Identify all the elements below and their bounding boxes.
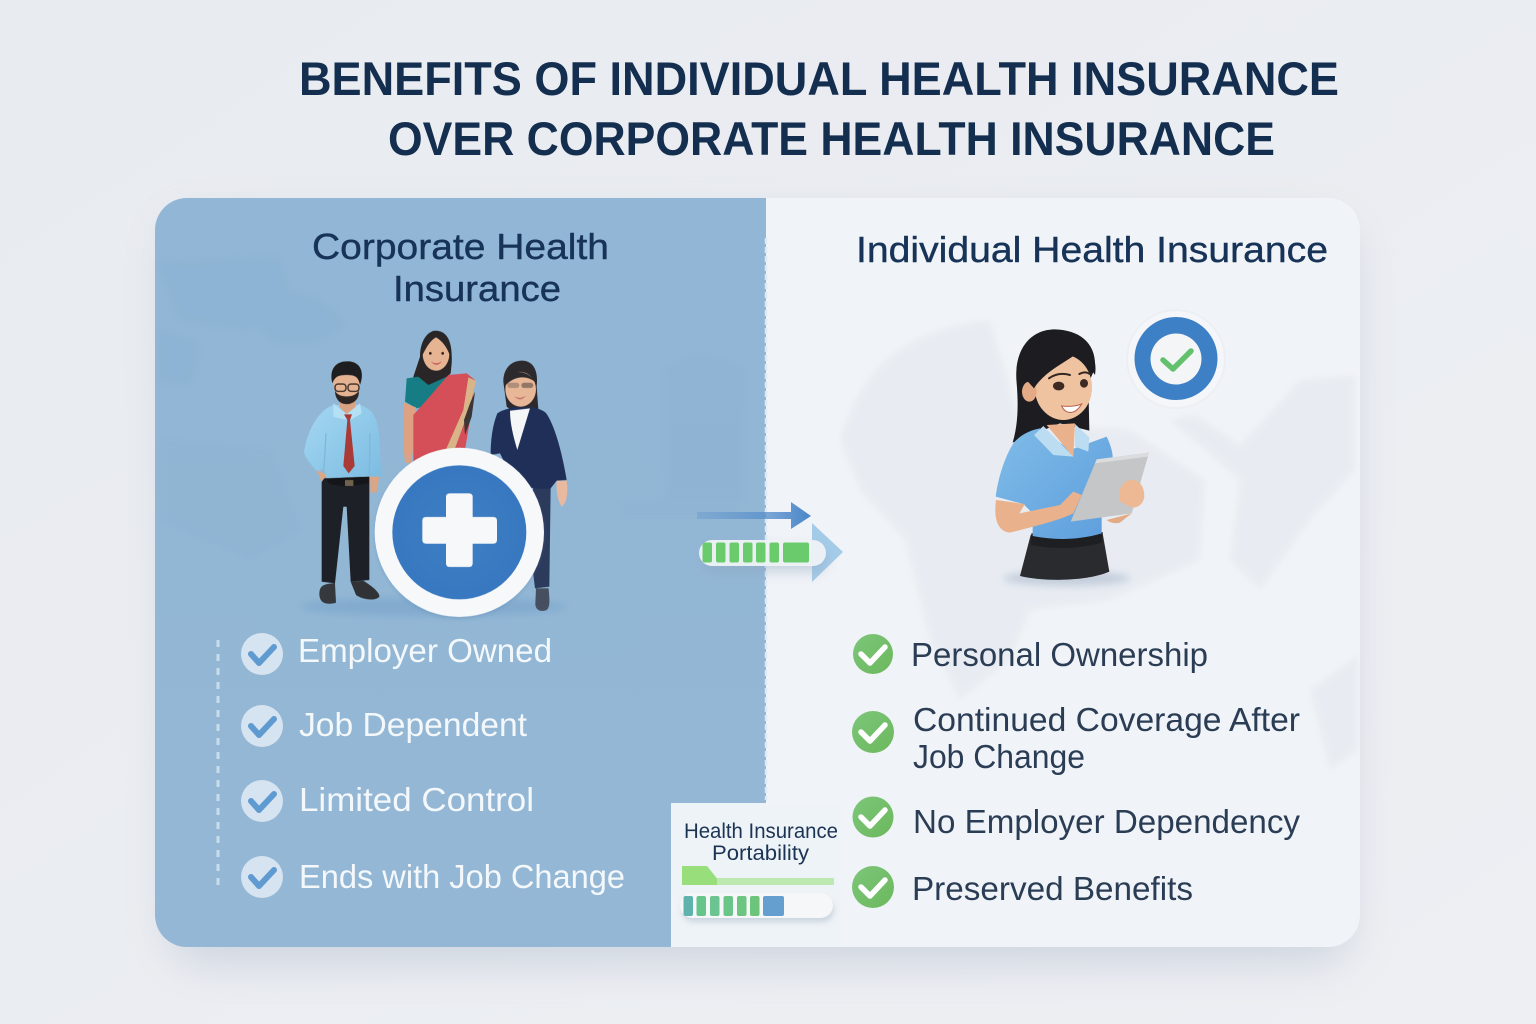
title: OVER CORPORATE HEALTH INSURANCE — [388, 112, 1275, 165]
item: job dependent: Job Dependent — [299, 706, 527, 743]
portability transfer arrows and bar — [697, 502, 843, 582]
arrow: top blue — [697, 502, 811, 529]
callout heading: Portability — [712, 842, 810, 865]
item: employer owned: Employer Owned — [298, 632, 552, 669]
item: limited control: Limited Control — [299, 781, 534, 818]
faint world map right — [840, 320, 1358, 770]
item: no employer dependency: No Employer Dependency — [913, 803, 1300, 840]
check badge — [1127, 310, 1225, 408]
item: continued coverage: Continued Coverage After — [913, 701, 1300, 738]
item: job dependent — [241, 705, 527, 747]
suited woman — [491, 361, 567, 611]
heading: individual health insurance: Individual Health Insurance — [856, 229, 1328, 270]
medical cross badge — [375, 448, 544, 618]
panel: individual health insurance background — [766, 198, 1360, 947]
card shadow — [170, 222, 1350, 962]
progress bar small — [680, 893, 834, 922]
individual list — [852, 634, 1300, 908]
title: BENEFITS OF INDIVIDUAL HEALTH INSURANCE — [299, 52, 1339, 105]
callout heading — [684, 820, 838, 865]
progress bar — [699, 540, 826, 572]
faint world map left — [158, 258, 745, 560]
individual woman with tablet illustration — [995, 329, 1149, 586]
item: ends with job change: Ends with Job Change — [299, 858, 625, 895]
heading: corporate health insurance: Insurance — [393, 268, 561, 309]
corporate list — [241, 632, 625, 898]
man with tie — [304, 361, 381, 604]
dotted vertical line left list — [216, 640, 220, 890]
callout heading: Health Insurance — [684, 820, 838, 843]
green indicator — [682, 866, 834, 885]
dashed divider — [765, 238, 767, 800]
heading: corporate health insurance — [312, 226, 609, 309]
heading: corporate health insurance: Corporate Health — [312, 226, 609, 267]
item: limited control — [241, 780, 534, 822]
item: continued coverage — [852, 701, 1300, 775]
comparison card — [155, 198, 1360, 947]
arrow: light blue triangle — [812, 523, 843, 582]
item: personal ownership: Personal Ownership — [911, 636, 1208, 673]
item: continued coverage: Job Change — [913, 738, 1085, 775]
corporate employees illustration — [300, 331, 567, 618]
callout: health insurance portability — [671, 803, 840, 947]
item: preserved benefits: Preserved Benefits — [912, 870, 1193, 907]
title — [299, 52, 1339, 165]
saree woman — [404, 331, 476, 467]
panel: corporate health insurance background — [155, 198, 766, 947]
